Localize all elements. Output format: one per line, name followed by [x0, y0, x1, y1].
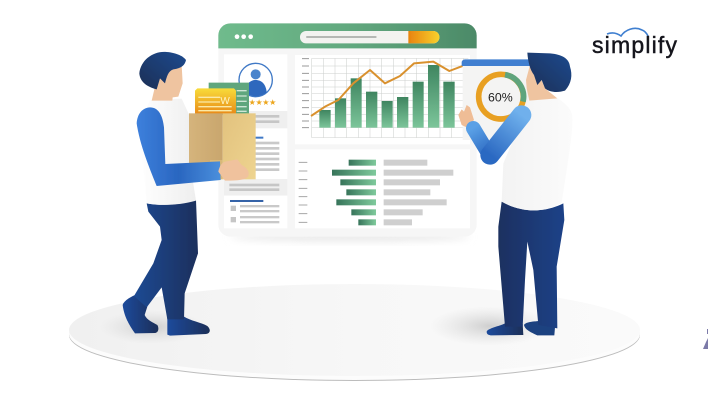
back shoe	[123, 295, 158, 333]
shirt	[138, 99, 196, 205]
shoes	[487, 323, 523, 335]
hand	[458, 105, 474, 127]
dashboard window	[218, 23, 477, 237]
head	[152, 65, 183, 101]
hair	[527, 53, 571, 92]
man with donut card	[458, 53, 572, 335]
face	[526, 65, 557, 101]
rating stars: ★★★★	[249, 98, 276, 107]
profile avatar	[239, 63, 272, 97]
window header	[218, 23, 477, 48]
window shadow	[230, 233, 470, 241]
partial icon at right edge	[703, 329, 708, 349]
logo: simplify: simplify	[592, 32, 678, 58]
hand	[218, 159, 249, 181]
platform	[69, 284, 640, 381]
front shoe	[167, 317, 210, 336]
man carrying box	[123, 52, 256, 336]
trend line	[311, 62, 463, 116]
sidebar	[224, 54, 287, 228]
arm	[137, 107, 221, 186]
trousers	[498, 202, 564, 328]
horizontal bar chart panel	[295, 149, 470, 228]
cardboard box	[189, 113, 256, 179]
bars	[319, 65, 455, 128]
shirt	[502, 98, 572, 210]
line and bar chart panel	[295, 55, 470, 144]
arm	[473, 115, 522, 156]
hair	[139, 52, 186, 89]
donut card: 60%	[488, 91, 513, 105]
documents: W	[220, 96, 230, 107]
documents	[195, 83, 249, 115]
donut card	[462, 59, 530, 140]
trousers	[134, 200, 198, 319]
